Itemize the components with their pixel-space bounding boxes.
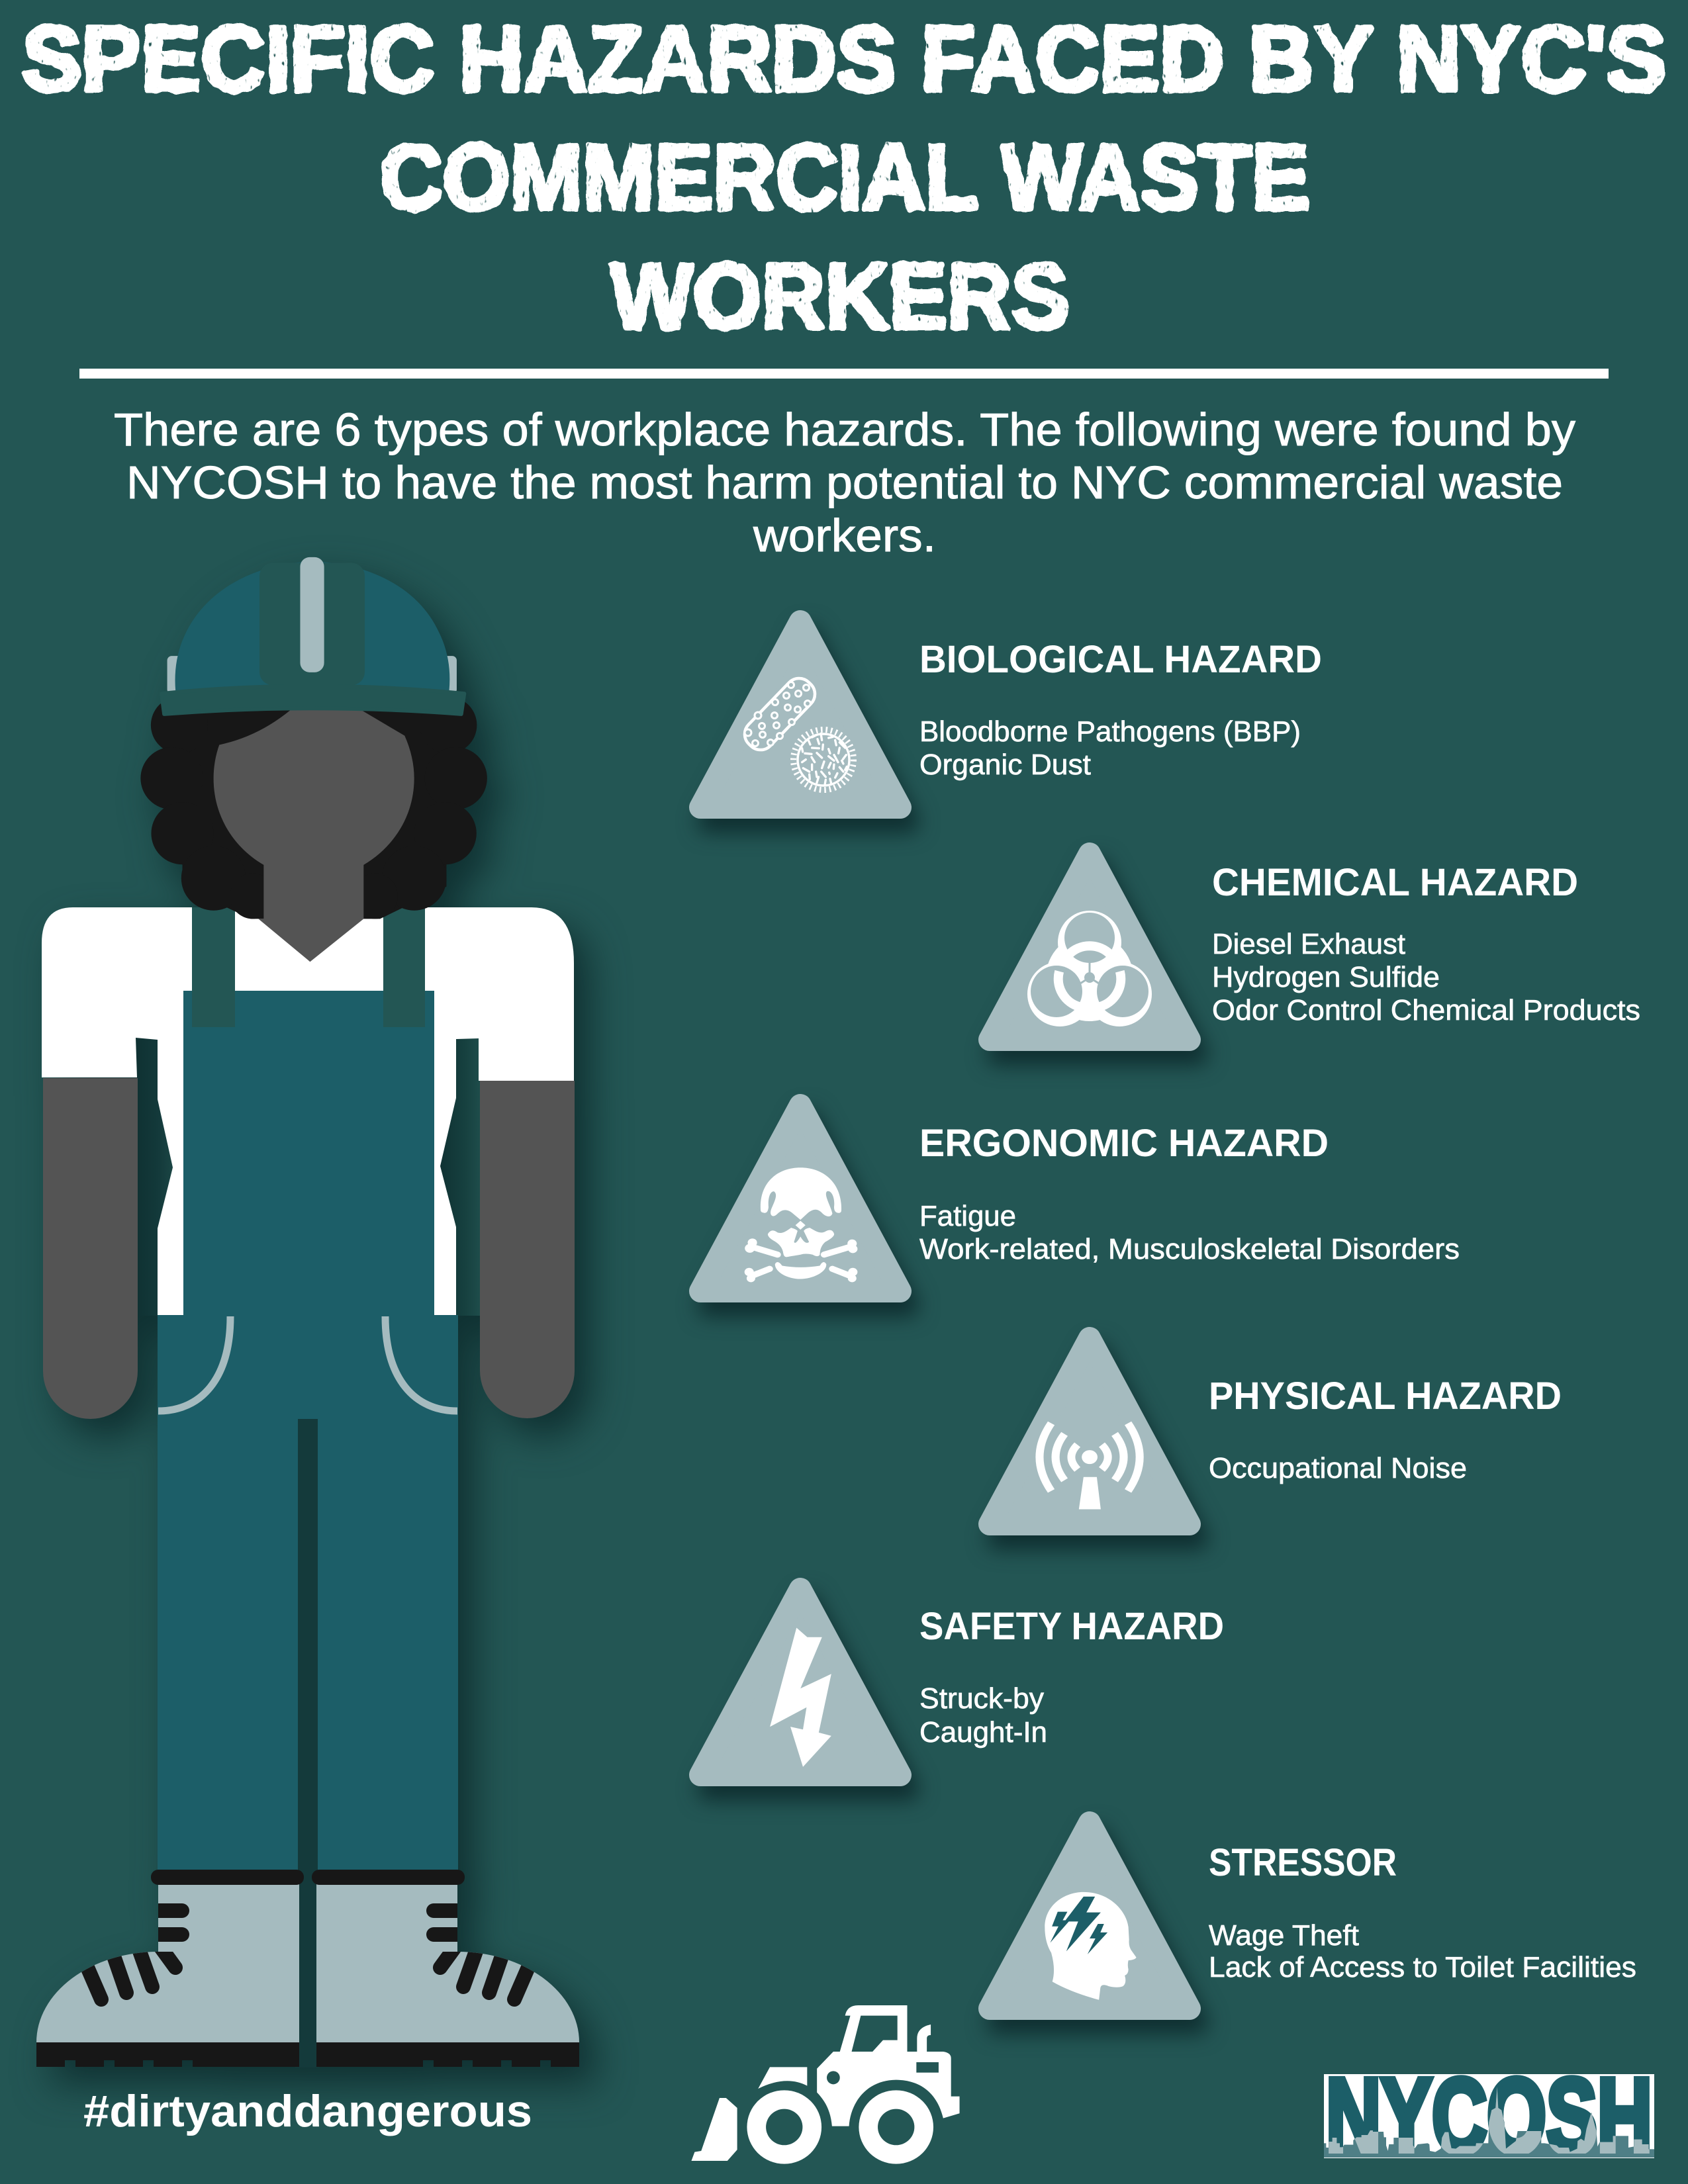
face and neck <box>214 710 414 962</box>
icon: bacteria and virus <box>739 672 854 790</box>
shirt <box>42 907 574 1315</box>
warning triangle: safety <box>700 1589 900 1775</box>
list: biological: Bloodborne Pathogens (BBP) <box>919 715 1301 748</box>
list: chemical: Odor Control Chemical Products <box>1212 994 1640 1026</box>
title: WORKERS <box>610 244 1070 348</box>
title: COMMERCIAL WASTE <box>380 125 1309 229</box>
heading: physical: PHYSICAL HAZARD <box>1209 1375 1562 1418</box>
list: stressor: Wage Theft <box>1209 1919 1359 1952</box>
hashtag: #dirtyanddangerous <box>83 2086 532 2136</box>
heading: ergonomic: ERGONOMIC HAZARD <box>919 1122 1329 1165</box>
icon: noise antenna <box>1039 1424 1140 1510</box>
warning triangle: chemical <box>990 854 1190 1040</box>
list: chemical: Hydrogen Sulfide <box>1212 961 1440 993</box>
list: chemical <box>1212 928 1640 1026</box>
hazard: biological <box>700 621 1322 807</box>
title: SPECIFIC HAZARDS FACED BY NYC'S <box>22 7 1666 111</box>
hazard: chemical <box>990 854 1640 1040</box>
list: ergonomic <box>919 1200 1460 1265</box>
warning triangle: stressor <box>990 1823 1190 2009</box>
warning triangle: physical <box>990 1338 1190 1524</box>
warning triangle: biological <box>700 621 900 807</box>
list: safety: Caught-In <box>919 1716 1047 1749</box>
helmet <box>162 557 464 714</box>
intro text: There are 6 types of workplace hazards. The following were found by <box>114 404 1575 455</box>
heading: chemical: CHEMICAL HAZARD <box>1212 861 1578 904</box>
pockets <box>158 1316 457 1411</box>
right arm <box>480 1081 575 1418</box>
list: safety <box>919 1682 1047 1749</box>
logo: NYCOSH <box>1324 2074 1654 2158</box>
warning triangle: ergonomic <box>700 1105 900 1291</box>
title <box>22 7 1666 348</box>
list: stressor <box>1209 1919 1636 1983</box>
heading: stressor: STRESSOR <box>1209 1841 1397 1884</box>
icon: lightning bolt <box>770 1628 831 1767</box>
icon: wheel loader <box>691 2005 960 2164</box>
intro text <box>114 404 1575 561</box>
right boot <box>312 1870 579 2067</box>
list: ergonomic: Fatigue <box>919 1200 1016 1232</box>
worker figure <box>36 557 579 2068</box>
overalls <box>158 991 458 1870</box>
hazard: ergonomic <box>700 1105 1460 1291</box>
icon: biohazard <box>1027 911 1152 1026</box>
hazard: safety <box>700 1589 1224 1775</box>
hazard: physical <box>990 1338 1562 1524</box>
heading: biological: BIOLOGICAL HAZARD <box>919 638 1322 681</box>
list: safety: Struck-by <box>919 1682 1044 1715</box>
list: biological: Organic Dust <box>919 749 1091 781</box>
hair <box>140 697 487 919</box>
straps <box>192 907 425 1027</box>
left boot <box>36 1870 304 2067</box>
icon: skull and crossbones <box>745 1167 857 1282</box>
heading: safety: SAFETY HAZARD <box>919 1605 1224 1648</box>
intro text: workers. <box>753 510 936 561</box>
icon: head with lightning <box>1045 1892 1137 2000</box>
hazard: stressor <box>990 1823 1636 2009</box>
list: biological <box>919 715 1301 781</box>
list: ergonomic: Work-related, Musculoskeletal Disorders <box>919 1233 1460 1265</box>
list: physical: Occupational Noise <box>1209 1452 1467 1484</box>
list: chemical: Diesel Exhaust <box>1212 928 1405 960</box>
list: stressor: Lack of Access to Toilet Facilities <box>1209 1951 1636 1983</box>
intro text: NYCOSH to have the most harm potential to NYC commercial waste <box>126 457 1563 508</box>
left arm <box>43 1078 138 1419</box>
